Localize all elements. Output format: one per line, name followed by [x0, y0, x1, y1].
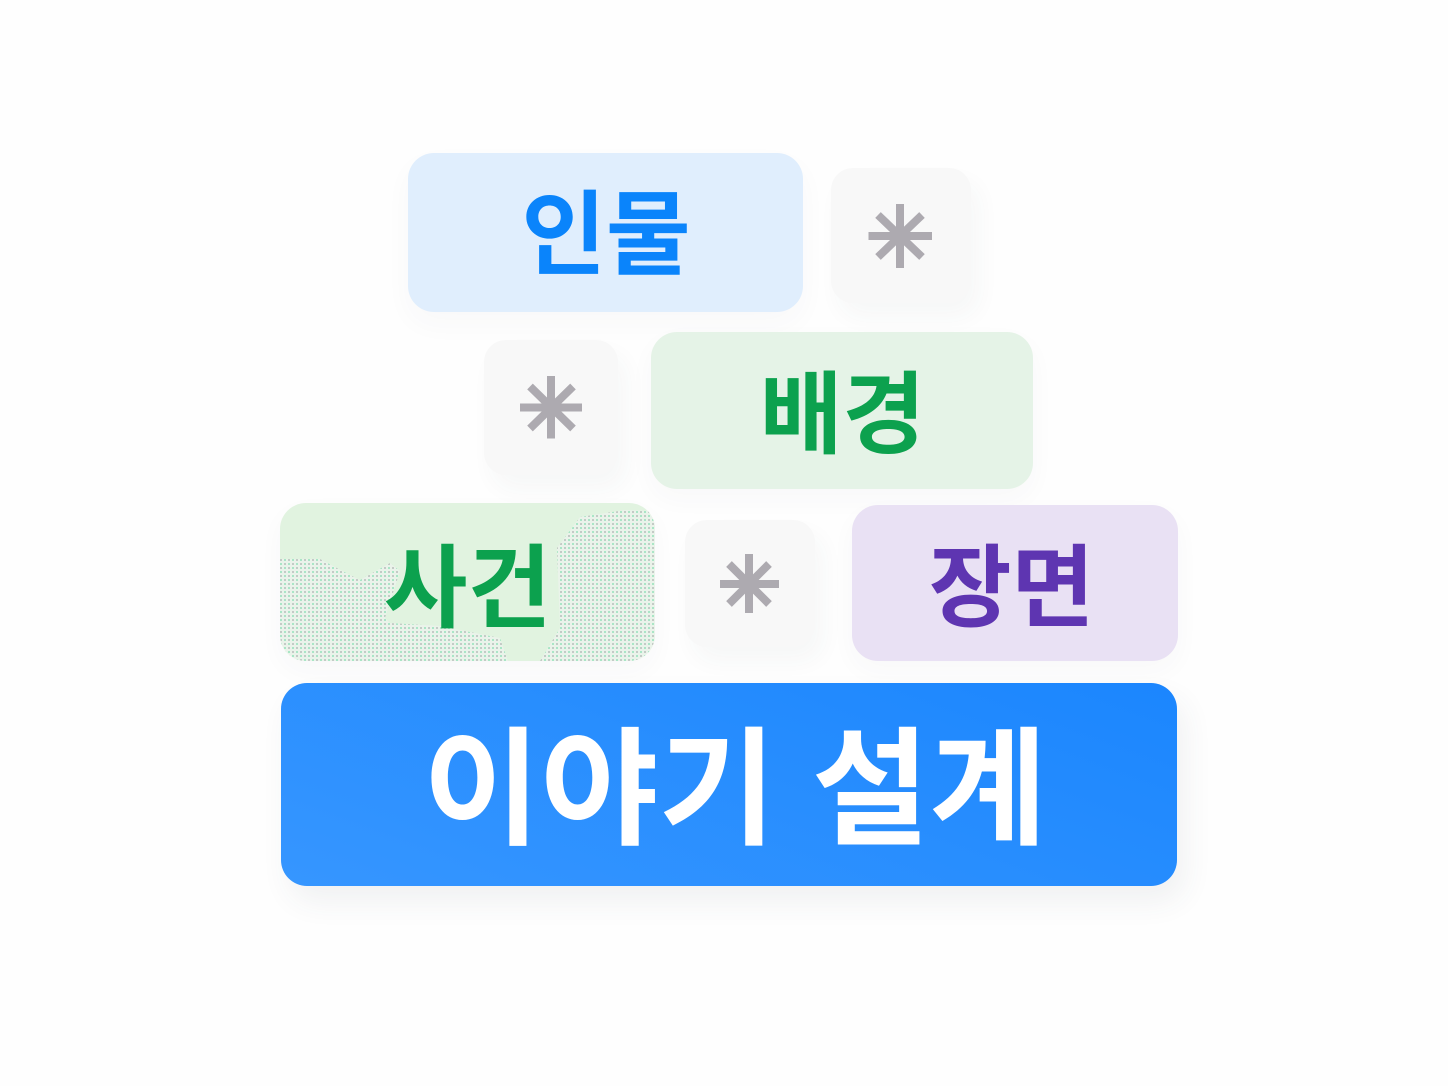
dither texture [280, 510, 655, 661]
title banner [281, 683, 1177, 886]
label: 배경: 배경 [760, 366, 925, 466]
panel: 인물 card [408, 153, 803, 312]
label: 사건: 사건 [384, 539, 551, 640]
title: 이야기 설계: 이야기 설계 [423, 719, 1047, 862]
panel: 배경 card [651, 332, 1033, 489]
panel: asterisk card 1 [831, 168, 971, 303]
panel: asterisk card 2 [484, 340, 618, 475]
icon: asterisk 2 [520, 376, 582, 438]
icon: asterisk 3 [720, 554, 779, 613]
icon: asterisk 1 [868, 204, 932, 268]
label: 장면: 장면 [929, 539, 1094, 639]
panel: 사건 card [280, 503, 655, 661]
panel: asterisk card 3 [685, 520, 815, 647]
panel: 장면 card [852, 505, 1178, 661]
label: 인물: 인물 [521, 185, 691, 287]
